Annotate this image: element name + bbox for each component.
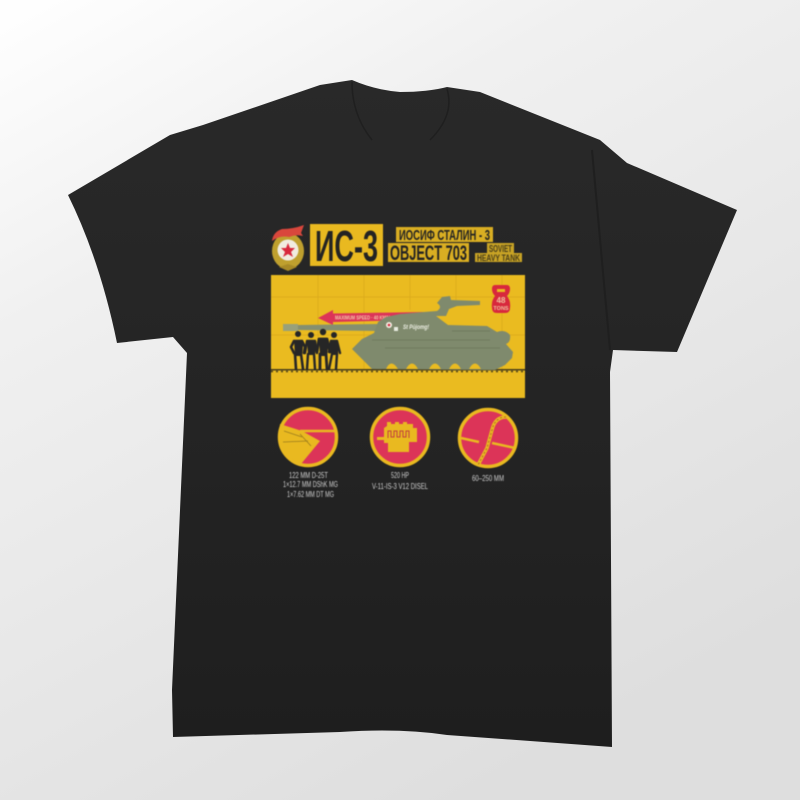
heading: Object 703: OBJECT 703 — [390, 242, 467, 265]
icon: engine — [372, 408, 428, 466]
heading: Soviet heavy tank — [475, 243, 522, 263]
heading: Object 703 — [388, 242, 469, 265]
caption: engine: 520 HP — [391, 471, 409, 480]
weight badge — [492, 285, 510, 313]
turret markings — [386, 322, 392, 328]
caption: armament — [283, 471, 338, 499]
title: IS-3 — [310, 222, 383, 271]
caption: armament: 1×12.7 MM DShK MG — [283, 480, 338, 489]
heading: Iosif Stalin 3: ИОСИФ СТАЛИН - 3 — [399, 227, 490, 244]
figure four — [329, 332, 340, 369]
heading: Soviet heavy tank: HEAVY TANK — [477, 253, 520, 263]
caption: engine: V-11-IS-3 V12 DISEL — [372, 482, 428, 491]
crew silhouettes — [291, 329, 340, 369]
printed graphic — [271, 222, 525, 499]
caption: armour: 60–250 MM — [472, 474, 504, 483]
caption: armament: 122 MM D-25T — [289, 471, 328, 480]
heading: Soviet heavy tank: SOVIET — [489, 244, 512, 255]
figure two — [305, 332, 317, 369]
arrow: maximum speed — [318, 310, 425, 325]
weight badge: 48 — [497, 296, 506, 305]
caption: engine — [372, 471, 428, 491]
roof machine gun — [424, 296, 480, 316]
weight badge: TONS — [493, 306, 509, 312]
icon: armour — [460, 410, 516, 466]
road wheels — [386, 364, 481, 369]
caption: armament: 1×7.62 MM DT MG — [287, 490, 334, 499]
figure three — [317, 329, 330, 369]
icon: armament — [279, 408, 336, 466]
icon: guards medal — [272, 225, 304, 271]
title: IS-3: ИС-3 — [315, 222, 378, 271]
heading: Iosif Stalin 3 — [396, 227, 493, 244]
tank silhouette — [283, 296, 513, 370]
panel: tank side profile — [271, 275, 525, 398]
figure one — [291, 331, 305, 369]
arrow: maximum speed: MAXIMUM SPEED · 40 KM/H — [335, 316, 390, 322]
ground line — [271, 369, 525, 372]
tank silhouette: St Pŭjomg! — [403, 325, 429, 331]
t-shirt — [68, 80, 737, 747]
